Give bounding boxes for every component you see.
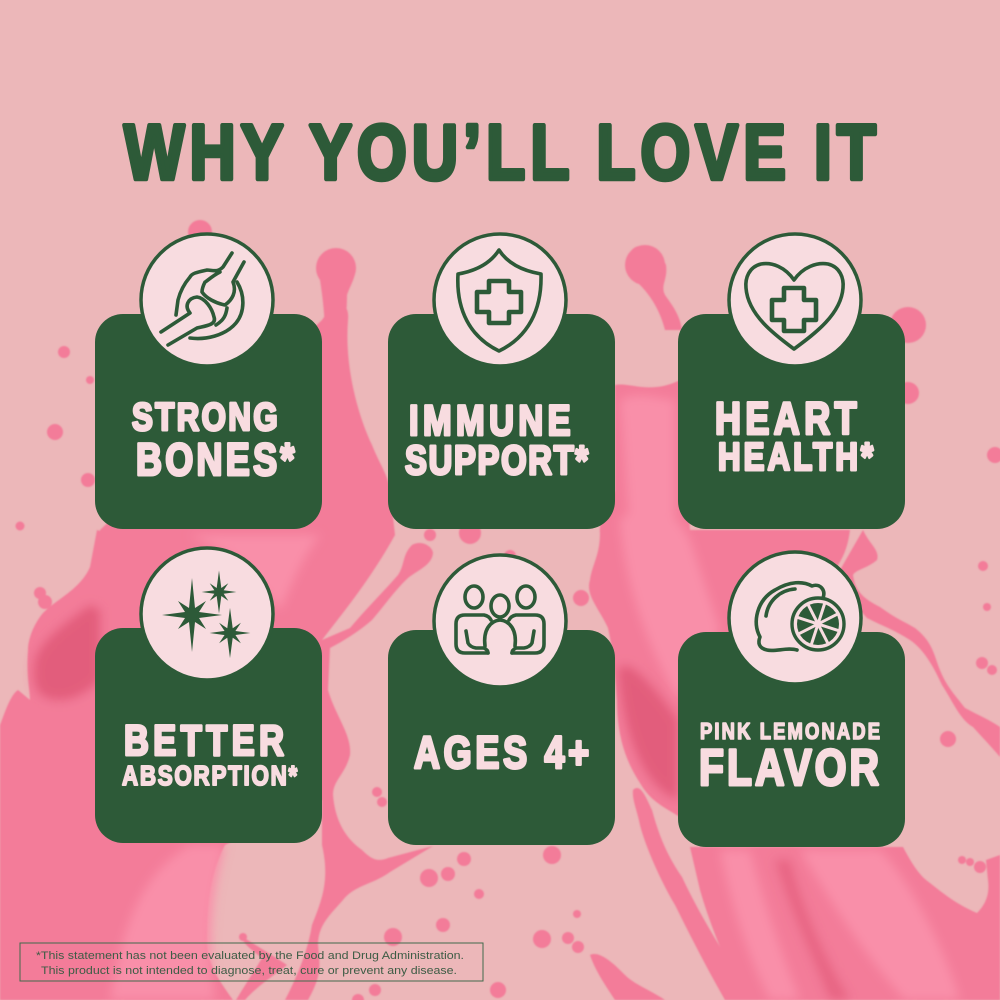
label: immune support: SUPPORT* [405, 436, 589, 483]
icon: shield [434, 234, 566, 366]
pink juice splash background [0, 220, 1000, 1000]
disclaimer box [20, 943, 483, 981]
disclaimer box: This product is not intended to diagnose, treat, cure or prevent any disease. [41, 965, 457, 977]
label: immune support: IMMUNE [409, 397, 571, 445]
card panel [678, 314, 905, 529]
card panel [388, 630, 615, 845]
icon: heart [729, 234, 861, 366]
label: heart health: HEART [715, 393, 857, 444]
label: ages 4+: AGES 4+ [414, 727, 589, 778]
card: pink lemonade flavor [678, 552, 905, 847]
label: pink lemonade flavor: PINK LEMONADE [700, 719, 880, 745]
card: ages 4+ [388, 555, 615, 845]
icon: lemon [729, 552, 861, 684]
card: heart health [678, 234, 905, 529]
card panel [95, 314, 322, 529]
title: WHY YOU’LL LOVE IT [124, 109, 876, 196]
icon: bone joint [141, 234, 273, 366]
label: strong bones: STRONG [132, 396, 278, 439]
card panel [95, 628, 322, 843]
icon: people [434, 555, 566, 687]
label: heart health [715, 393, 873, 479]
label: pink lemonade flavor: FLAVOR [699, 739, 879, 796]
disclaimer box: *This statement has not been evaluated by the Food and Drug Administration. [36, 950, 464, 962]
card: better absorption [95, 548, 322, 843]
card: strong bones [95, 234, 322, 529]
label: immune support [405, 397, 589, 483]
icon: sparkles [141, 548, 273, 680]
card panel [388, 314, 615, 529]
label: better absorption: BETTER [124, 717, 284, 765]
label: better absorption [122, 717, 297, 792]
label: strong bones: BONES* [136, 434, 295, 485]
card: immune support [388, 234, 615, 529]
label: better absorption: ABSORPTION* [122, 761, 297, 792]
label: heart health: HEALTH* [718, 436, 873, 479]
card panel [678, 632, 905, 847]
label: strong bones [132, 396, 295, 485]
